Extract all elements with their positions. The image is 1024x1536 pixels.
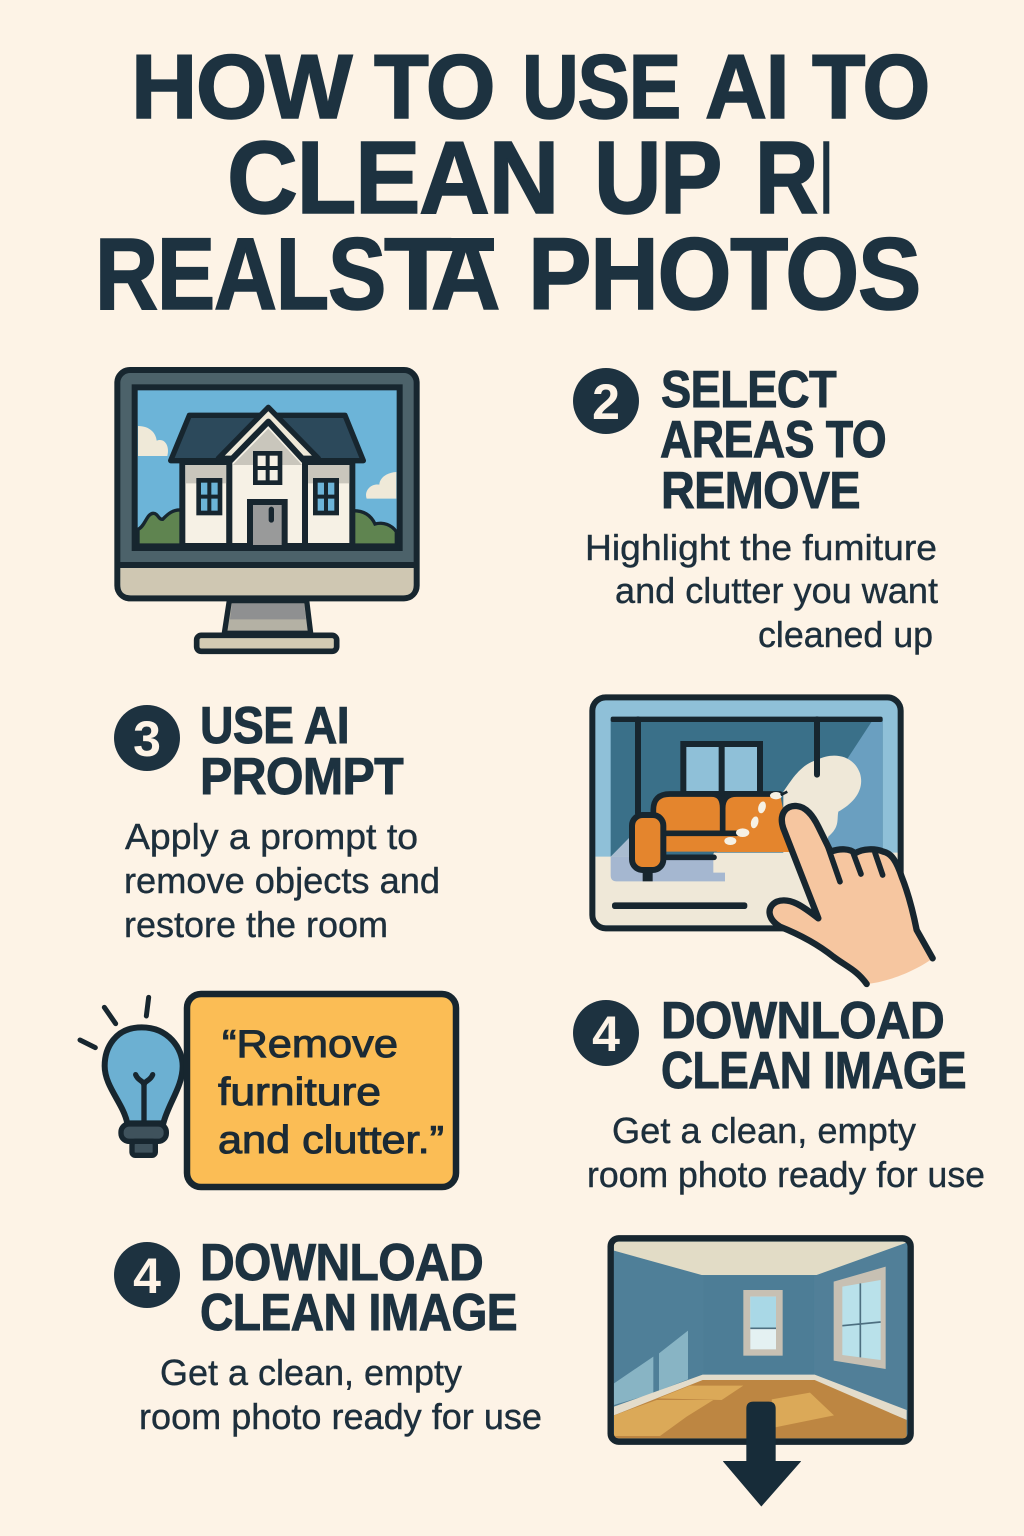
step 4 heading (right): CLEAN IMAGE — [661, 1042, 966, 1100]
step 3 description — [124, 816, 440, 945]
step 3 heading: USE AI — [200, 697, 349, 755]
step 2 heading: AREAS TO — [660, 411, 886, 469]
step 4 description (left): Get a clean, empty — [160, 1352, 462, 1393]
icon: tablet with hand selecting sofa — [592, 697, 933, 984]
title: CLEAN — [227, 120, 558, 235]
title: R — [755, 120, 817, 235]
callout: prompt example: “Remove — [222, 1023, 398, 1066]
title: T — [384, 217, 451, 331]
step 2 description: Highlight the fumiture — [585, 527, 937, 568]
callout: prompt example: and clutter.” — [218, 1119, 444, 1162]
step 2 description — [585, 527, 938, 655]
title: USE — [522, 37, 680, 138]
icon: empty room photo with download arrow — [611, 1238, 911, 1506]
step 4 heading (right): DOWNLOAD — [661, 992, 944, 1050]
title: PHOTOS — [528, 217, 920, 331]
title: A — [431, 217, 499, 331]
step 4 description (right): Get a clean, empty — [612, 1110, 916, 1151]
step 4 badge (left): 4 — [133, 1248, 161, 1304]
step 3 badge: 3 — [133, 711, 161, 767]
step 3 badge — [114, 705, 180, 771]
step 3 description: Apply a prompt to — [125, 816, 418, 857]
step 4 description (left) — [139, 1352, 542, 1437]
step 4 description (right) — [587, 1110, 985, 1195]
callout: prompt example — [187, 994, 456, 1187]
step 4 badge (right) — [573, 1000, 639, 1066]
step 3 heading — [200, 697, 404, 806]
title: TO — [374, 37, 494, 138]
step 2 description: cleaned up — [758, 614, 933, 655]
step 4 heading (left) — [200, 1234, 517, 1342]
title — [95, 37, 929, 331]
step 2 description: and clutter you want — [615, 570, 938, 611]
step 4 heading (right) — [661, 992, 966, 1100]
step 2 badge: 2 — [592, 374, 620, 430]
callout: prompt example: furniture — [218, 1071, 381, 1114]
title: HOW — [131, 37, 353, 138]
step 2 heading: SELECT — [661, 361, 837, 419]
step 3 heading: PROMPT — [200, 748, 404, 806]
icon: monitor showing house — [117, 370, 417, 651]
step 3 description: remove objects and — [124, 860, 440, 901]
step 2 heading — [660, 361, 886, 520]
step 2 badge — [573, 368, 639, 434]
step 2 heading: REMOVE — [661, 462, 860, 520]
step 4 badge (right): 4 — [592, 1006, 620, 1062]
title: I — [821, 120, 831, 235]
title: UP — [594, 120, 721, 235]
step 4 description (left): room photo ready for use — [139, 1396, 542, 1437]
icon: light bulb — [80, 997, 183, 1155]
step 4 heading (left): DOWNLOAD — [200, 1234, 483, 1292]
title: REALS — [95, 217, 385, 331]
title: TO — [812, 37, 929, 138]
step 4 heading (left): CLEAN IMAGE — [200, 1284, 517, 1342]
title: AI — [705, 37, 788, 138]
step 3 description: restore the room — [124, 904, 388, 945]
step 4 description (right): room photo ready for use — [587, 1154, 985, 1195]
step 4 badge (left) — [114, 1242, 180, 1308]
